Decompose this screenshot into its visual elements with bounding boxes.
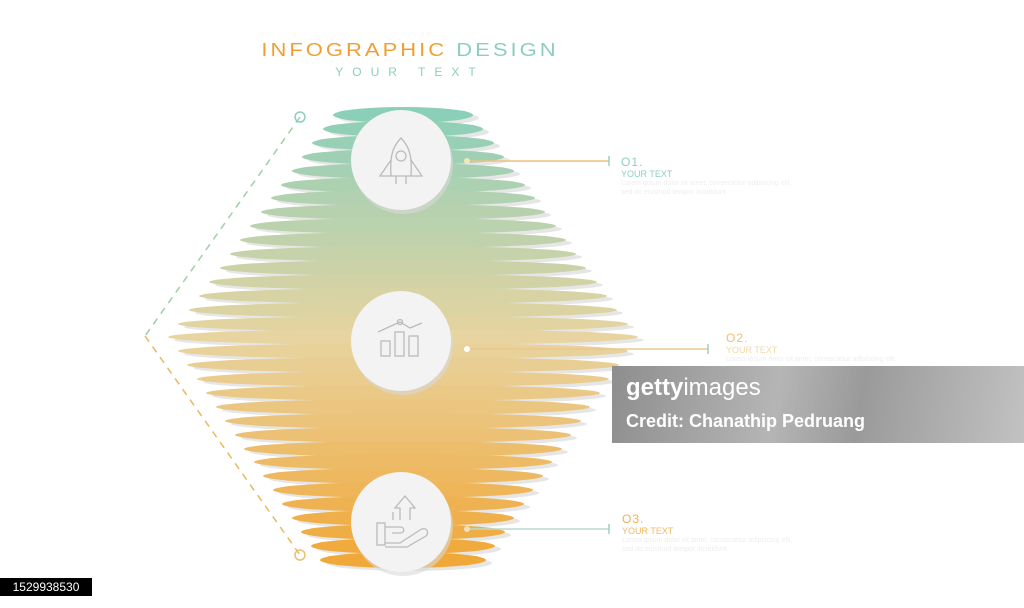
text block 03 bbox=[622, 512, 792, 553]
circle: rocket bbox=[351, 110, 453, 214]
text block 02: O2. bbox=[726, 331, 748, 345]
subtitle: YOUR TEXT bbox=[335, 65, 485, 79]
text block 02: YOUR TEXT bbox=[726, 345, 777, 355]
watermark banner: gettyimages bbox=[626, 374, 761, 401]
dashed hexagon outline bbox=[145, 112, 305, 560]
circle: growth hand bbox=[351, 472, 453, 576]
icon: hand with arrow bbox=[377, 496, 428, 547]
footer id bar bbox=[0, 578, 92, 596]
text block 01: sed do eiusmod tempor incididunt. bbox=[621, 189, 728, 196]
connector lines bbox=[464, 156, 708, 534]
text block 01 bbox=[621, 155, 791, 196]
text block 03: YOUR TEXT bbox=[622, 526, 673, 536]
text block 03: Lorem ipsum dolor sit amet, consectetur adipiscing elit, bbox=[622, 537, 792, 544]
circle: chart bbox=[351, 291, 453, 395]
text block 01: O1. bbox=[621, 155, 643, 169]
text block 02 bbox=[726, 331, 896, 363]
text block 02: Lorem ipsum dolor sit amet, consectetur adipiscing elit. bbox=[726, 356, 896, 363]
icon: bar chart bbox=[378, 320, 422, 356]
text block 03: sed do eiusmod tempor incididunt. bbox=[622, 546, 729, 553]
title: INFOGRAPHIC DESIGN bbox=[261, 39, 559, 60]
watermark banner: Credit: Chanathip Pedruang bbox=[626, 411, 865, 431]
stacked ellipse hexagon bbox=[168, 107, 644, 571]
text block 03: O3. bbox=[622, 512, 644, 526]
text block 01: Lorem ipsum dolor sit amet, consectetur adipiscing elit, bbox=[621, 180, 791, 187]
text block 01: YOUR TEXT bbox=[621, 169, 672, 179]
watermark banner bbox=[612, 366, 1024, 443]
icon: rocket bbox=[380, 138, 422, 184]
footer id bar: 1529938530 bbox=[13, 580, 79, 594]
